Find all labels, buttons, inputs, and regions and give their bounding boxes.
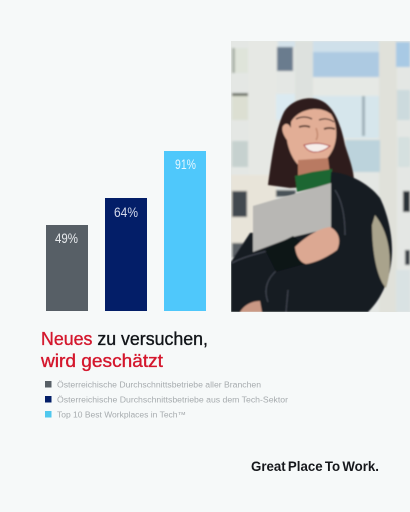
- bar: 49%: 49%: [55, 230, 78, 246]
- bar: 49%: [46, 225, 88, 311]
- bar: 91%: [164, 151, 206, 311]
- hair: [268, 98, 354, 188]
- skin lower left: [240, 301, 262, 312]
- bar chart: [46, 151, 206, 311]
- smile: [304, 143, 330, 152]
- legend item: all sectors: Österreichische Durchschnittsbetriebe aller Branchen: [57, 380, 261, 390]
- hand: [295, 227, 339, 264]
- legend item: tech sector: Österreichische Durchschnittsbetriebe aus dem Tech-Sektor: [57, 396, 288, 404]
- bar: 91%: 91%: [175, 156, 196, 172]
- eyebrows and eyes: [296, 117, 334, 122]
- neck: [298, 158, 330, 178]
- infographic canvas: [40, 41, 410, 471]
- laptop: [253, 183, 331, 252]
- turtleneck: [295, 169, 332, 192]
- nose shadow: [316, 128, 318, 140]
- bar: 64%: 64%: [114, 204, 138, 220]
- title: Neues zu versuchen,: [41, 329, 208, 349]
- title: [40, 329, 208, 371]
- photo: smiling woman holding a laptop: [225, 35, 410, 320]
- building background: [225, 35, 410, 320]
- jacket: [231, 172, 392, 312]
- logo: Great Place To Work: Great Place To Work.: [251, 458, 379, 474]
- bar: 64%: [105, 198, 147, 311]
- legend: [45, 380, 288, 420]
- woman: [231, 98, 392, 312]
- title: wird geschätzt: [40, 351, 163, 371]
- legend item: top 10: Top 10 Best Workplaces in Tech™: [57, 410, 186, 420]
- sleeve cuff: [265, 236, 305, 272]
- face: [282, 109, 336, 168]
- jacket highlights: [372, 215, 390, 288]
